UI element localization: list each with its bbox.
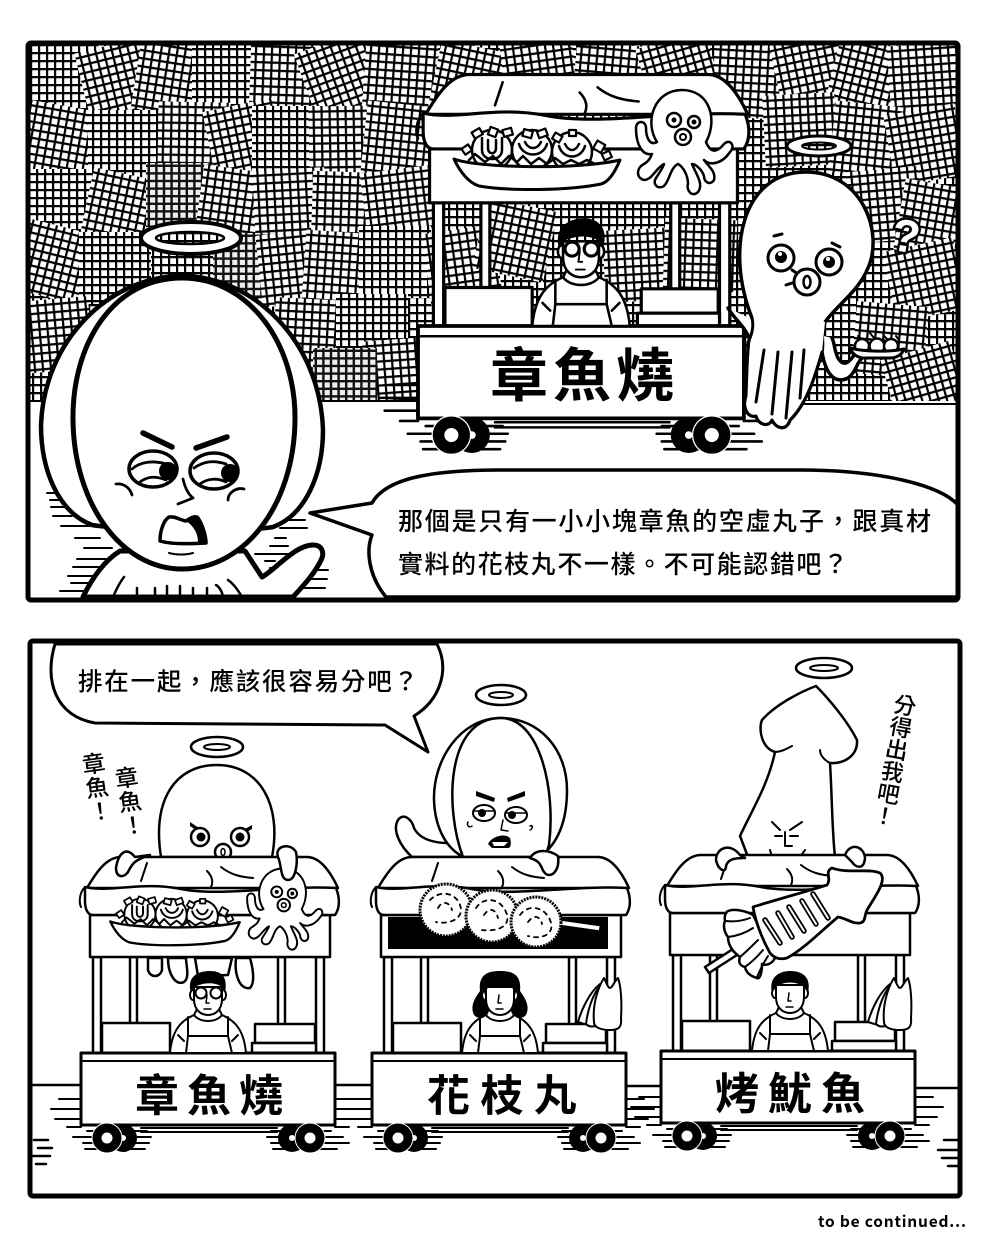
dried squid on grill	[705, 868, 882, 978]
stall 2 group: meatball character	[342, 685, 654, 1153]
halo	[191, 737, 243, 757]
halo	[141, 222, 241, 254]
speed hatching	[47, 493, 328, 591]
three hanakimaru balls	[420, 884, 561, 947]
question mark: ?	[887, 208, 924, 264]
hand	[530, 851, 558, 875]
halo	[796, 658, 852, 678]
speech text: 排在一起，應該很容易分吧？	[78, 663, 418, 698]
hanging squid	[868, 978, 911, 1030]
octopus head peeking	[159, 765, 274, 860]
hood	[41, 276, 323, 530]
sweater body with waving arm	[83, 545, 323, 597]
ground line	[30, 401, 956, 404]
halo	[787, 136, 851, 156]
black grill window	[388, 917, 608, 949]
food stall with sign 章魚燒	[380, 75, 780, 454]
speech text: 章魚！ left: 章魚！	[75, 750, 119, 826]
hands on roof	[716, 847, 865, 870]
squid character body	[740, 686, 857, 857]
dish	[110, 896, 240, 945]
sign: 章魚燒	[135, 1060, 283, 1124]
cart	[631, 855, 943, 1151]
speech bubble: panel 2	[51, 644, 443, 752]
sign: 花枝丸	[427, 1062, 577, 1124]
footer caption: to be continued...	[818, 1210, 966, 1232]
vertical speech text: 分得出我吧！	[867, 691, 923, 830]
ground lines	[30, 1085, 958, 1166]
seller with glasses	[532, 218, 630, 326]
stall 1 group: octopus	[51, 737, 363, 1153]
small takoyaki plate	[850, 333, 904, 358]
cart	[342, 857, 654, 1153]
speech bubble	[310, 470, 958, 597]
panel: bottom panel scene	[30, 641, 960, 1196]
speech text: 實料的花枝丸不一樣。不可能認錯吧？	[398, 545, 848, 581]
small octopus mascot on stall	[636, 90, 732, 194]
stall sign text: 章魚燒	[490, 329, 674, 413]
small octopus	[247, 868, 322, 950]
hand on roof	[116, 852, 150, 876]
panel border	[28, 43, 958, 600]
seller with long hair	[462, 971, 538, 1053]
speech text: 章魚！ right: 章魚！	[108, 764, 152, 840]
hanging squid	[578, 978, 621, 1030]
tail arm	[396, 817, 460, 857]
speech text: 那個是只有一小小塊章魚的空虛丸子，跟真材	[398, 502, 931, 538]
mouth	[160, 517, 206, 544]
panel: top panel scene	[11, 29, 977, 600]
halo	[476, 685, 526, 705]
head	[434, 718, 567, 857]
seller	[170, 971, 246, 1053]
sign: 烤魷魚	[715, 1058, 865, 1122]
face oval	[73, 278, 295, 569]
seller	[752, 971, 828, 1051]
tentacles under awning	[148, 958, 253, 988]
octopus customer with question mark	[728, 136, 924, 428]
cart	[51, 857, 363, 1153]
takoyaki dish on stall	[454, 127, 620, 190]
crosshatch wall background	[30, 46, 956, 401]
panel border	[30, 641, 960, 1196]
squid ball character, foreground	[41, 222, 328, 597]
stall 3 group: squid character	[631, 658, 943, 1151]
speech text: 章魚！ left	[75, 750, 152, 840]
